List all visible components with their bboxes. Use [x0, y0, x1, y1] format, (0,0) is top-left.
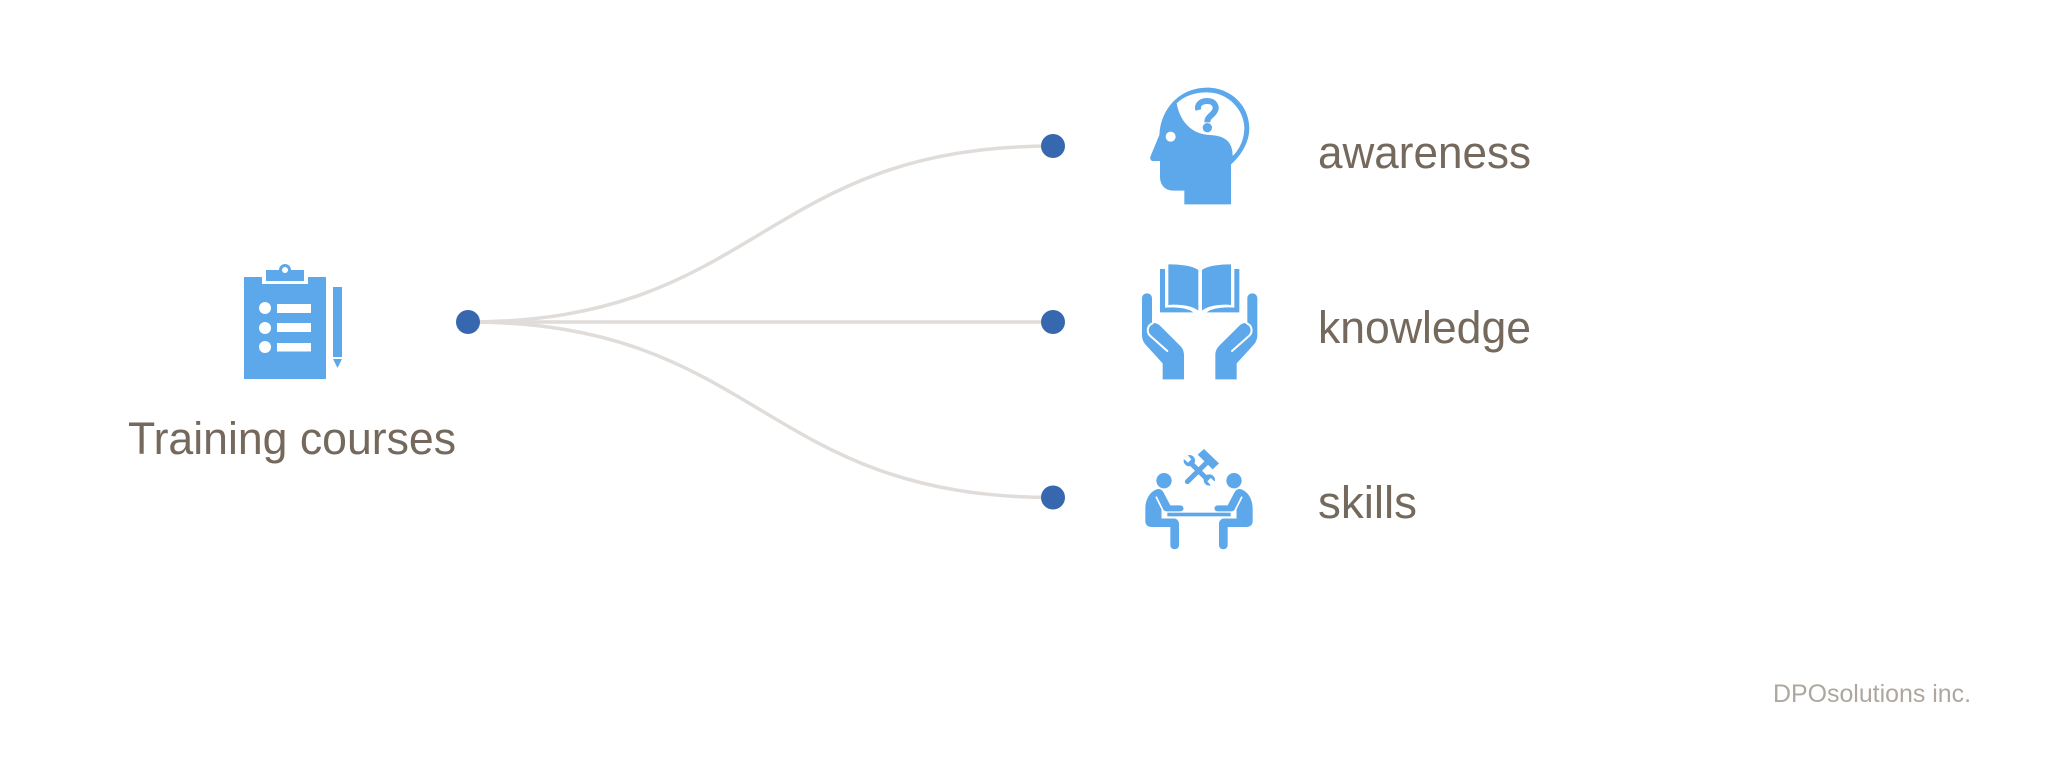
icon: head with question mark	[1150, 88, 1249, 204]
label: awareness: awareness	[1318, 127, 1531, 178]
icon: clipboard and pencil	[244, 264, 342, 379]
label: skills: skills	[1318, 477, 1417, 528]
node: knowledge	[1041, 310, 1065, 334]
connector curves	[468, 146, 1053, 498]
label: knowledge: knowledge	[1318, 302, 1531, 353]
icon: hands holding book	[1142, 264, 1257, 379]
source node	[456, 310, 480, 334]
node: awareness	[1041, 134, 1065, 158]
label: Training courses: Training courses	[128, 413, 456, 464]
icon: two people with tools	[1145, 449, 1253, 549]
node: skills	[1041, 486, 1065, 510]
credit: DPOsolutions inc.	[1773, 680, 1971, 708]
